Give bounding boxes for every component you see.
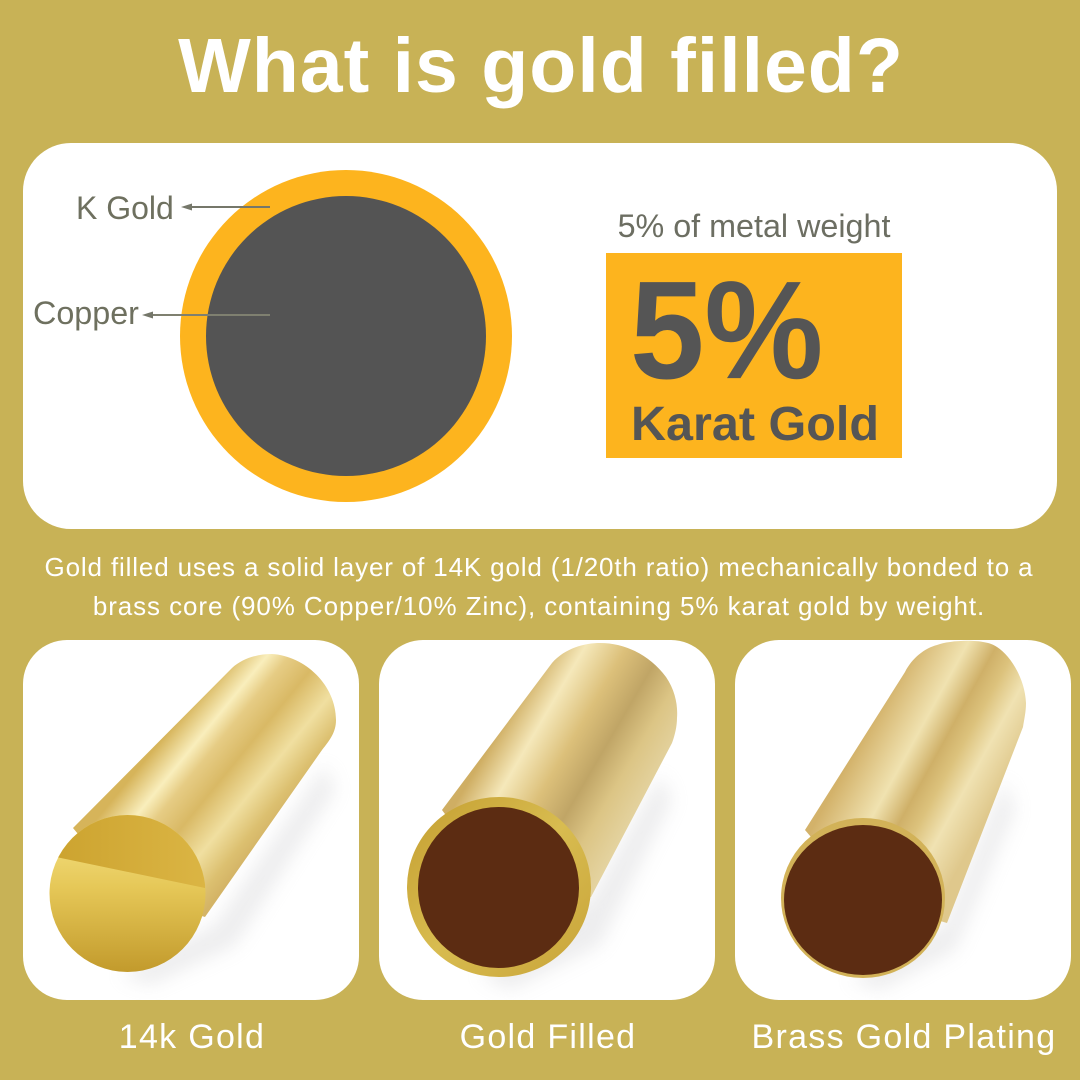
icon: gold filled rod — [407, 643, 678, 988]
description text — [45, 552, 1033, 621]
karat gold label: Karat Gold — [631, 397, 879, 451]
callout: 5% karat gold — [606, 253, 902, 458]
label: brass gold plating: Brass Gold Plating — [752, 1018, 1056, 1056]
label: 14k gold: 14k Gold — [119, 1018, 265, 1056]
title: What is gold filled? — [178, 23, 904, 109]
icon: plated brass rod — [781, 640, 1026, 988]
description text: Gold filled uses a solid layer of 14K gold (1/20th ratio) mechanically bonded to a — [45, 552, 1033, 582]
panel: gold filled diagram — [23, 143, 1057, 529]
label: gold filled: Gold Filled — [460, 1018, 636, 1056]
cross-section diagram — [33, 170, 512, 502]
panel: 14k gold rod — [23, 640, 359, 1000]
cross-section diagram: K Gold — [76, 190, 174, 226]
panel: brass gold plating rod — [735, 640, 1071, 1000]
icon: solid gold rod — [50, 654, 336, 984]
large percentage: 5% — [630, 253, 823, 409]
cross-section diagram: Copper — [33, 295, 139, 331]
description text: brass core (90% Copper/10% Zinc), containing 5% karat gold by weight. — [93, 591, 985, 621]
panel: gold filled rod — [379, 640, 715, 1000]
weight caption: 5% of metal weight — [618, 208, 890, 244]
